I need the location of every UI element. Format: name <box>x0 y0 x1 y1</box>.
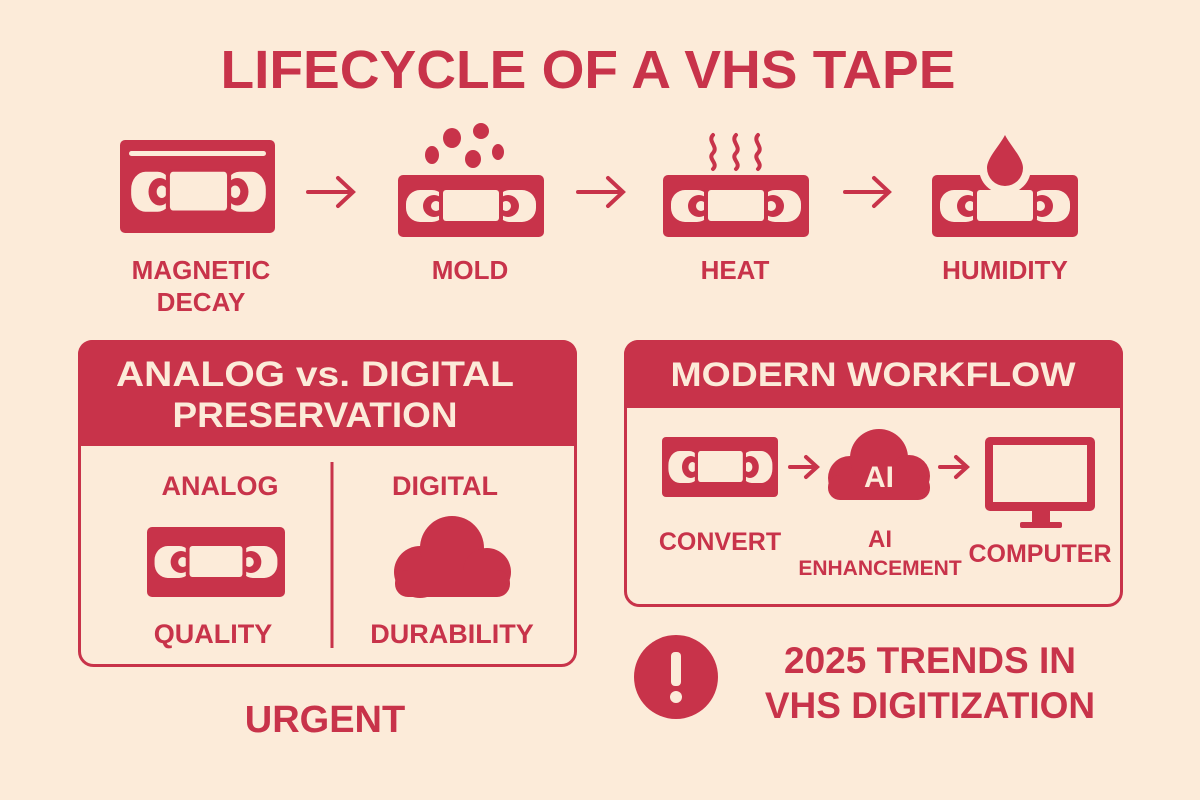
label: ai enhancement: AI <box>868 526 892 553</box>
icon: ai cloud: AI <box>864 461 894 494</box>
text: 2025 trends <box>765 640 1095 726</box>
label: digital: DIGITAL <box>392 471 498 501</box>
label: computer: COMPUTER <box>968 540 1112 568</box>
label: durability: DURABILITY <box>370 619 534 649</box>
title: LIFECYCLE OF A VHS TAPE <box>220 40 956 100</box>
text: 2025 trends: VHS DIGITIZATION <box>765 685 1095 726</box>
panel: modern workflow <box>624 340 1123 606</box>
icon: tape heat <box>663 135 809 237</box>
label: convert: CONVERT <box>659 528 781 556</box>
arrow 2 <box>578 178 623 206</box>
icon: tape humidity <box>932 135 1078 237</box>
arrow 3 <box>845 178 889 206</box>
icon: ai cloud <box>828 429 930 500</box>
label: analog: ANALOG <box>162 471 278 501</box>
icon: tape magnetic decay <box>120 140 275 233</box>
panel header: modern workflow: MODERN WORKFLOW <box>670 356 1076 394</box>
icon: convert tape <box>662 437 778 497</box>
text: 2025 trends: 2025 TRENDS IN <box>784 640 1076 681</box>
icon: cloud <box>394 516 511 598</box>
icon: tape mold <box>398 123 544 237</box>
icon: computer <box>985 437 1095 528</box>
label: quality: QUALITY <box>154 619 272 649</box>
labels: lifecycle stages: HEAT <box>701 255 770 285</box>
label: ai enhancement <box>798 526 962 580</box>
panel header: analog vs digital <box>78 340 577 446</box>
panel header: analog vs digital: PRESERVATION <box>172 396 458 435</box>
panel header: modern workflow <box>624 340 1123 408</box>
icon: exclamation <box>634 635 718 719</box>
labels: lifecycle stages: MOLD <box>432 255 508 285</box>
labels: lifecycle stages: HUMIDITY <box>942 255 1068 285</box>
label: urgent: URGENT <box>245 699 405 741</box>
labels: lifecycle stages: MAGNETIC <box>132 255 271 285</box>
panel: analog vs digital <box>78 340 577 666</box>
labels: lifecycle stages: DECAY <box>157 287 245 317</box>
labels: lifecycle stages <box>132 255 1068 317</box>
icon: analog tape <box>147 527 285 597</box>
arrow 1 <box>308 178 353 206</box>
arrow: convert to ai <box>790 457 817 477</box>
label: ai enhancement: ENHANCEMENT <box>798 557 962 580</box>
arrow: ai to computer <box>940 457 967 477</box>
panel header: analog vs digital: ANALOG vs. DIGITAL <box>116 355 514 394</box>
